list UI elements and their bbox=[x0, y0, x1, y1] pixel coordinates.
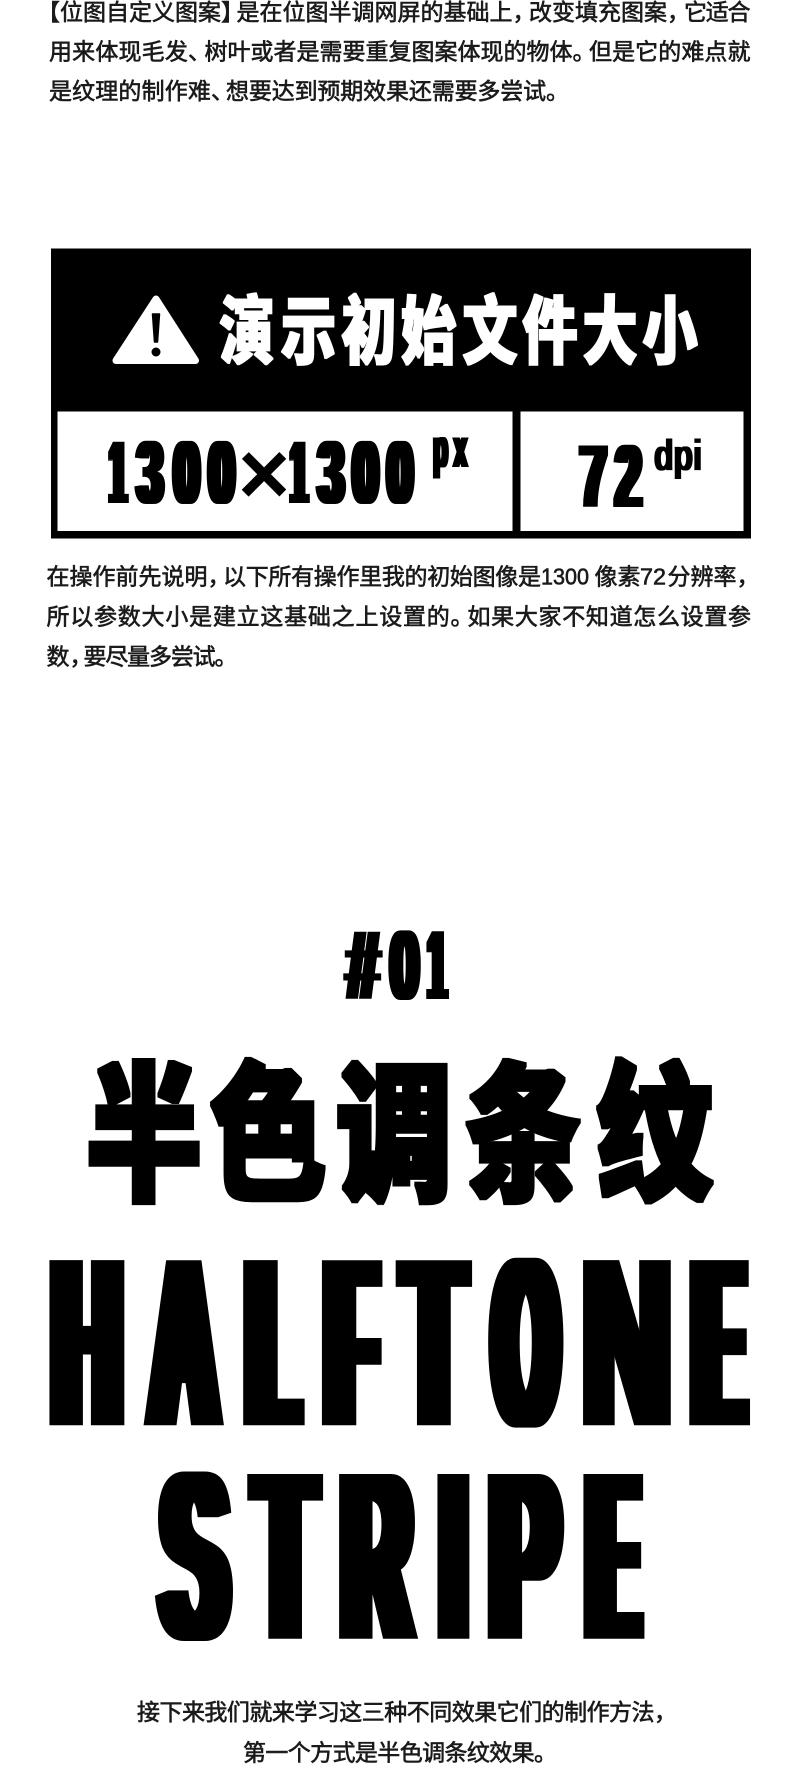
text block: closing intro bbox=[137, 1699, 677, 1766]
unit: px: px bbox=[433, 418, 467, 480]
text block: bitmap custom pattern description: 树叶或者是需要重复图案体现的物体。 bbox=[204, 38, 596, 64]
heading: STRIPE: I bbox=[442, 1422, 465, 1689]
heading: STRIPE: T bbox=[256, 1422, 314, 1690]
icon: warning triangle bbox=[116, 299, 196, 360]
heading: STRIPE: S bbox=[162, 1422, 227, 1690]
heading: HALFTONE: E bbox=[697, 1210, 741, 1477]
section number: #01 bbox=[346, 910, 446, 1021]
text block: bitmap custom pattern description: 想要达到预期效果还需要多尝试。 bbox=[226, 78, 569, 104]
text block: bitmap custom pattern description: 但是它的难点就 bbox=[589, 38, 750, 64]
value: 1300×1300 bbox=[110, 422, 413, 523]
text block: operation note: 以下所有操作里我的初始图像是 bbox=[223, 564, 541, 590]
heading: HALFTONE: T bbox=[405, 1209, 463, 1477]
text block: operation note: 像素 bbox=[594, 564, 640, 590]
panel: demo initial file size bbox=[51, 248, 751, 538]
text block: operation note: 所以参数大小是建立这基础之上设置的。 bbox=[46, 604, 474, 630]
section number: #01: 0 bbox=[390, 910, 419, 1020]
heading: STRIPE: E bbox=[591, 1423, 635, 1691]
text block: operation note bbox=[46, 564, 760, 670]
heading: HALFTONE: L bbox=[250, 1207, 295, 1477]
text block: bitmap custom pattern description bbox=[37, 0, 750, 104]
heading: HALFTONE: A bbox=[151, 1209, 216, 1477]
text block: operation note: 数， bbox=[46, 644, 92, 670]
text block: operation note: 72 bbox=[640, 564, 666, 590]
unit: dpi: dpi bbox=[654, 432, 702, 480]
value: 1300×1300: 300 bbox=[137, 423, 234, 522]
heading: HALFTONE: N bbox=[583, 1210, 671, 1477]
text block: closing intro: 第一个方式是半色调条纹效果。 bbox=[243, 1740, 557, 1766]
heading: demo initial file size: 演示初始文件大小 bbox=[219, 271, 698, 380]
text block: bitmap custom pattern description: 是纹理的制作难、 bbox=[49, 78, 234, 104]
text block: operation note: 在操作前先说明， bbox=[46, 564, 230, 590]
text block: bitmap custom pattern description: 用来体现毛发、 bbox=[49, 38, 211, 64]
cell: dimensions bbox=[58, 412, 512, 531]
heading: STRIPE: P bbox=[491, 1422, 558, 1690]
value: 1300×1300: × bbox=[238, 423, 290, 523]
heading: STRIPE: R bbox=[343, 1424, 410, 1690]
section number: #01: 1 bbox=[428, 912, 446, 1021]
value: 1300×1300: 1 bbox=[110, 422, 126, 522]
text block: operation note: 分辨率， bbox=[668, 564, 760, 590]
section number: #01: # bbox=[346, 911, 380, 1021]
value: 1300×1300: 1 bbox=[291, 422, 307, 522]
value: 72: 72 bbox=[580, 427, 641, 526]
value: 1300×1300: 300 bbox=[318, 423, 413, 522]
cell: resolution bbox=[520, 412, 744, 531]
heading: HALFTONE: O bbox=[495, 1208, 557, 1476]
text block: operation note: 1300 bbox=[541, 564, 589, 590]
text block: operation note: 要尽量多尝试。 bbox=[84, 644, 238, 670]
heading: HALFTONE: F bbox=[329, 1209, 373, 1477]
text block: closing intro: 接下来我们就来学习这三种不同效果它们的制作方法， bbox=[137, 1699, 677, 1725]
heading: halftone stripe in Chinese: 半色调条纹 bbox=[87, 1015, 712, 1233]
heading: HALFTONE bbox=[53, 1207, 741, 1477]
heading: STRIPE bbox=[162, 1422, 635, 1691]
heading: HALFTONE: H bbox=[53, 1208, 121, 1477]
text block: operation note: 如果大家不知道怎么设置参 bbox=[468, 604, 751, 630]
